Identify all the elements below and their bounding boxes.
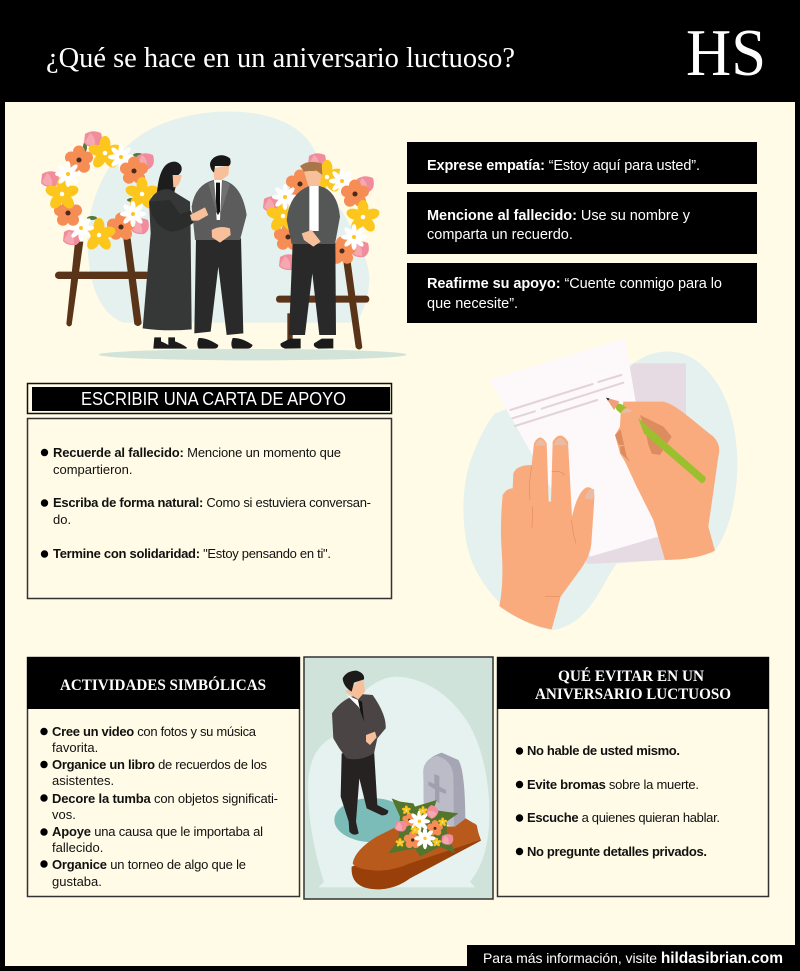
activities list: vos. — [52, 807, 76, 822]
arch — [308, 677, 489, 887]
footer: website — [467, 945, 800, 971]
thumb over pencil — [620, 408, 652, 470]
activities list — [40, 724, 278, 889]
panel header — [497, 657, 769, 709]
teal shadow — [334, 798, 409, 842]
coffin — [352, 818, 481, 889]
panel: support letter tips: Recuerde al fallecido: Mencione un momento que — [53, 445, 341, 460]
right wreath — [263, 153, 381, 270]
left hand — [499, 435, 594, 629]
woman in black — [143, 162, 195, 349]
man in dark jacket — [280, 162, 340, 349]
panel header: ACTIVIDADES SIMBÓLICAS — [60, 677, 266, 694]
paper back — [550, 363, 686, 564]
tip: reaffirm support: que necesite”. — [427, 296, 518, 312]
activities list: Organice un torneo de algo que le — [52, 857, 246, 872]
avoid list: Escuche a quienes quieran hablar. — [527, 810, 720, 825]
activities list: Apoye una causa que le importaba al — [52, 824, 263, 839]
panel header: QUÉ EVITAR EN UN — [558, 668, 704, 685]
activities list: favorita. — [52, 740, 98, 755]
activities list: fallecido. — [52, 840, 103, 855]
avoid list: Evite bromas sobre la muerte. — [527, 777, 699, 792]
illustration: hands writing a letter — [463, 338, 737, 630]
man in grey suit — [190, 155, 253, 349]
activities list: Cree un video con fotos y su música — [52, 724, 257, 739]
tip: mention the deceased — [407, 192, 757, 254]
background blob — [463, 351, 737, 630]
left easel — [55, 238, 150, 326]
man standing — [332, 671, 388, 835]
fingernails — [535, 438, 594, 499]
panel: support letter tips: do. — [53, 512, 71, 527]
right hand — [615, 402, 719, 560]
activities list: Decore la tumba con objetos significati- — [52, 791, 278, 806]
tombstone — [423, 753, 465, 827]
avoid list — [516, 743, 720, 859]
background blob — [87, 111, 369, 323]
tip: empathy — [407, 142, 757, 184]
tip: reaffirm support: Reafirme su apoyo: “Cuente conmigo para lo — [427, 276, 722, 292]
footer: website: Para más información, visite hildasibrian.com — [483, 950, 783, 967]
tip: reaffirm support — [407, 263, 757, 323]
heading: support letter — [28, 384, 392, 414]
tip: empathy: Exprese empatía: “Estoy aquí para usted”. — [427, 158, 700, 174]
right hand shadow — [615, 415, 672, 462]
right easel — [276, 262, 369, 349]
ground shadow — [99, 349, 407, 360]
activities list: asistentes. — [52, 773, 114, 788]
heading: support letter: ESCRIBIR UNA CARTA DE APOYO — [81, 389, 346, 409]
avoid list: No pregunte detalles privados. — [527, 844, 707, 859]
logo: HS: HS — [686, 16, 766, 90]
writing lines — [510, 375, 623, 426]
panel: support letter tips: Escriba de forma natural: Como si estuviera conversan- — [53, 495, 371, 510]
panel: support letter tips: compartieron. — [53, 462, 132, 477]
panel header: ANIVERSARIO LUCTUOSO — [535, 686, 731, 703]
tip: mention the deceased: Mencione al fallecido: Use su nombre y — [427, 208, 691, 224]
pencil — [606, 398, 706, 483]
title: ¿Qué se hace en un aniversario luctuoso? — [46, 42, 515, 74]
left wreath — [41, 131, 160, 252]
left hand creases — [529, 467, 576, 597]
panel: symbolic activities — [27, 657, 300, 896]
panel: support letter tips — [28, 418, 392, 598]
illustration: mourners with funeral wreaths — [41, 111, 407, 360]
panel: support letter tips: Termine con solidaridad: "Estoy pensando en ti". — [53, 546, 331, 561]
activities list: gustaba. — [52, 874, 102, 889]
avoid list: No hable de usted mismo. — [527, 743, 680, 758]
panel header — [27, 657, 300, 709]
flowers on coffin — [388, 798, 458, 857]
activities list: Organice un libro de recuerdos de los — [52, 757, 268, 772]
illustration: man at the grave — [304, 657, 493, 899]
panel: what to avoid — [497, 657, 769, 896]
paper front — [489, 338, 658, 557]
tip: mention the deceased: comparta un recuerdo. — [427, 227, 573, 243]
